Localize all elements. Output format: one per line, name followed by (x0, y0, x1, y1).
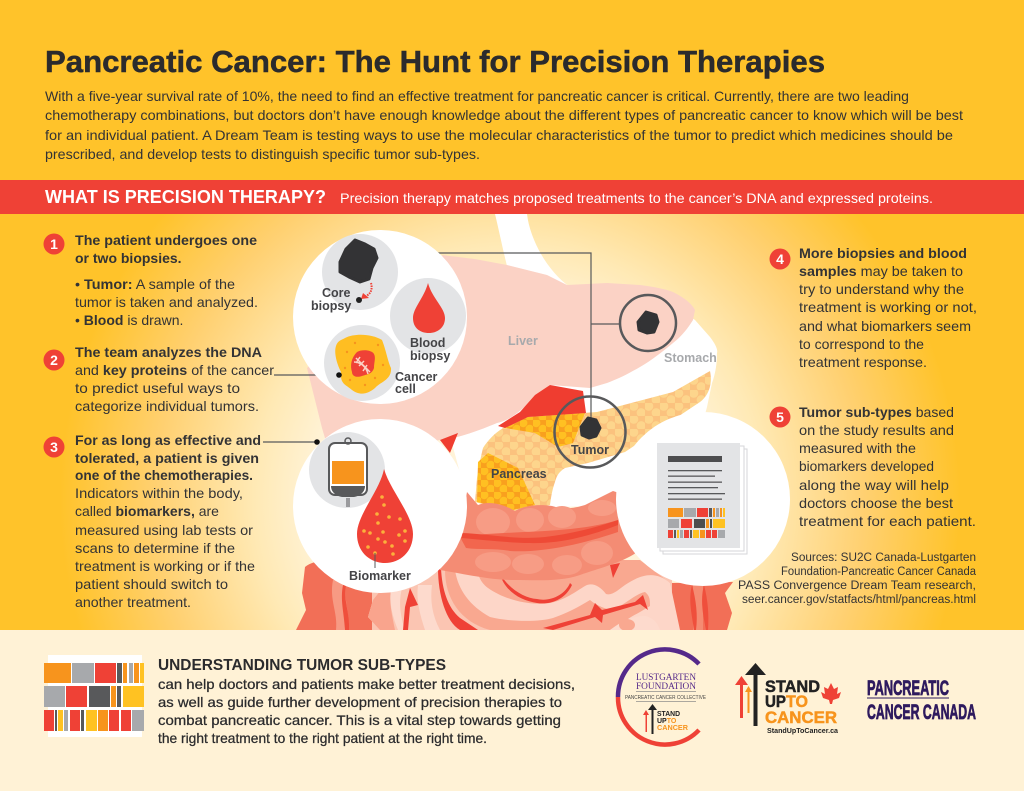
step 5: on the study results and (799, 422, 954, 438)
connector lines (263, 253, 620, 442)
logo: Lustgarten Foundation: PANCREATIC CANCER COLLECTIVE (625, 695, 707, 701)
iv bag (309, 432, 385, 508)
step 5: Tumor sub-types based (799, 404, 954, 420)
title: Pancreatic Cancer: The Hunt for Precision Therapies (45, 44, 825, 79)
intro paragraph: chemotherapy combinations, but doctors don’t have enough knowledge about the different types of pancreatic cancer to know which will be best (45, 107, 963, 123)
circle callout: pancreas tumor (554, 396, 626, 468)
intro paragraph: for an individual patient. A Dream Team is testing ways to use the molecular characteristics of the tumor to predict which medicines should be (45, 127, 953, 143)
step 1: The patient undergoes one (75, 232, 257, 248)
logo: Stand Up To Cancer: STAND (765, 677, 820, 696)
step 4: to correspond to the (799, 336, 924, 352)
circle callout: pancreas tumor: Tumor (571, 443, 609, 457)
step 4: 4 (776, 251, 784, 267)
step 4: and what biomarkers seem (799, 318, 971, 334)
step 4: try to understand why the (799, 281, 964, 297)
step 5: doctors choose the best (799, 495, 953, 511)
understanding tumor sub-types text: UNDERSTANDING TUMOR SUB-TYPES (158, 657, 446, 674)
logo: Lustgarten Foundation: FOUNDATION (636, 682, 696, 692)
logo: Pancreatic Cancer Canada (867, 677, 976, 724)
step 5: treatment for each patient. (799, 513, 976, 529)
logo: Stand Up To Cancer: StandUpToCancer.ca (767, 728, 838, 735)
step 4: samples may be taken to (799, 263, 963, 279)
logo: Stand Up To Cancer: CANCER (765, 708, 837, 727)
gallbladder red (498, 385, 586, 428)
middle panel glow (0, 214, 1024, 631)
sources: Sources: SU2C Canada-Lustgarten (791, 552, 976, 564)
step 3: called biomarkers, are (75, 503, 219, 519)
step 3 (44, 432, 261, 610)
step 3: For as long as effective and (75, 432, 261, 448)
logo: Lustgarten Foundation: LUSTGARTEN (636, 673, 696, 683)
transverse colon (440, 491, 640, 580)
cancer cell: Cancer (395, 370, 438, 384)
right colon (667, 582, 733, 630)
white circle: report (616, 412, 790, 586)
intro paragraph: With a five-year survival rate of 10%, the need to find an effective treatment for pancreatic cancer is critical. Currently, there are two leading (45, 88, 909, 104)
intro paragraph (45, 88, 963, 162)
step 2 (44, 344, 274, 414)
biomarker drop (357, 469, 413, 568)
stomach (450, 214, 717, 510)
logo: Stand Up To Cancer: UP (765, 692, 786, 711)
step 1: tumor is taken and analyzed. (75, 294, 258, 310)
understanding tumor sub-types text: combat pancreatic cancer. This is a vital step towards getting (158, 712, 561, 728)
step 4 (770, 245, 977, 370)
biomarker label: Biomarker (349, 569, 411, 583)
core biopsy: Core (322, 286, 351, 300)
sources: PASS Convergence Dream Team research, (738, 580, 976, 592)
cancer cell: cell (395, 382, 416, 396)
circle callout: stomach tumor (620, 295, 676, 351)
step 1: • Tumor: A sample of the (75, 276, 235, 292)
step 5: along the way will help (799, 477, 949, 493)
report document (657, 443, 747, 554)
label: liver: Liver (508, 334, 538, 348)
step 3: treatment is working or if the (75, 558, 255, 574)
icon: maple leaf (821, 683, 841, 704)
step 1: • Blood is drawn. (75, 312, 183, 328)
label: stomach: Stomach (664, 351, 717, 365)
small intestine (368, 560, 680, 631)
pancreas (475, 371, 711, 512)
step 3: 3 (50, 439, 58, 455)
step 3: Indicators within the body, (75, 485, 243, 501)
step 1 (44, 232, 258, 328)
white circle: biopsies (293, 230, 467, 404)
step 2: and key proteins of the cancer (75, 362, 274, 378)
sources: Foundation-Pancreatic Cancer Canada (781, 566, 977, 578)
logo: Lustgarten Foundation: UPTO (657, 718, 677, 725)
sources: seer.cancer.gov/statfacts/html/pancreas.html (742, 594, 976, 606)
banner: what is precision therapy (0, 180, 1024, 214)
logo: Lustgarten Foundation: STAND (657, 711, 680, 718)
blood biopsy: Blood (410, 336, 445, 350)
step 1: or two biopsies. (75, 250, 182, 266)
understanding tumor sub-types text: as well as guide further development of precision therapies to (158, 694, 562, 710)
logo: Stand Up To Cancer: TO (786, 692, 808, 711)
blood biopsy (390, 278, 466, 363)
label: pancreas: Pancreas (491, 467, 547, 481)
logo: Lustgarten Foundation: CANCER (657, 725, 688, 732)
core biopsy (311, 234, 398, 313)
banner: what is precision therapy: WHAT IS PRECISION THERAPY? (45, 187, 326, 207)
understanding tumor sub-types text (158, 657, 575, 746)
step 5: 5 (776, 409, 784, 425)
anatomy illustration (296, 214, 733, 631)
logo: Lustgarten Foundation (618, 649, 707, 745)
step 3: patient should switch to (75, 576, 228, 592)
step 4: More biopsies and blood (799, 245, 967, 261)
step 2: The team analyzes the DNA (75, 344, 262, 360)
sources (738, 552, 977, 606)
step 2: to predict useful ways to (75, 380, 240, 396)
step 3: tolerated, a patient is given (75, 450, 259, 466)
step 4: treatment response. (799, 354, 927, 370)
blood biopsy: biopsy (410, 349, 450, 363)
banner: what is precision therapy: Precision therapy matches proposed treatments to the cancer’s DNA and expressed proteins. (340, 190, 933, 206)
liver (307, 255, 695, 455)
left colon (296, 561, 385, 630)
step 2: categorize individual tumors. (75, 398, 259, 414)
step 5 (770, 404, 976, 529)
bottom panel (0, 630, 1024, 791)
step 5: measured with the (799, 440, 916, 456)
step 3: one of the chemotherapies. (75, 467, 253, 483)
logo: Stand Up To Cancer (735, 663, 841, 735)
step 4: treatment is working or not, (799, 299, 977, 315)
step 3: measured using lab tests or (75, 522, 253, 538)
intro paragraph: prescribed, and develop tests to distinguish specific tumor sub-types. (45, 146, 480, 162)
core biopsy: biopsy (311, 299, 351, 313)
logo: Pancreatic Cancer Canada: PANCREATIC (867, 677, 949, 700)
step 3: scans to determine if the (75, 540, 235, 556)
step 1: 1 (50, 236, 58, 252)
step 3: another treatment. (75, 594, 191, 610)
step 2: 2 (50, 352, 58, 368)
white circle: chemotherapy and biomarker (293, 419, 467, 593)
cancer cell (324, 325, 438, 401)
icon: tumor sub-type barcode (44, 655, 144, 737)
understanding tumor sub-types text: can help doctors and patients make better treatment decisions, (158, 676, 575, 692)
understanding tumor sub-types text: the right treatment to the right patient at the right time. (158, 730, 487, 746)
step 5: biomarkers developed (799, 458, 934, 474)
